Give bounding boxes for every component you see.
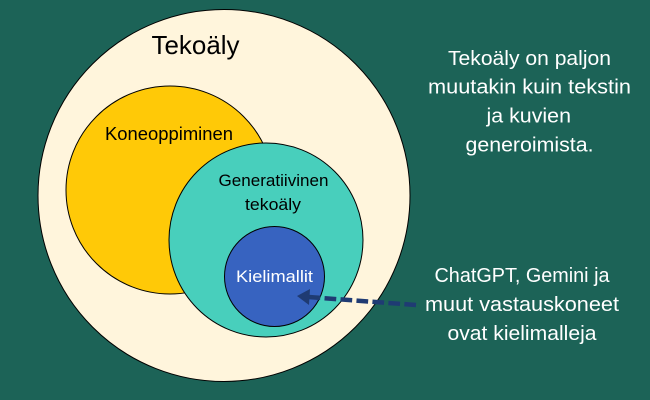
text block: intro: generoimista. [466,134,594,156]
text block: chatbots: ChatGPT, Gemini ja [434,264,610,287]
label: Koneoppiminen: Koneoppiminen [105,124,233,144]
text block: chatbots: muut vastauskoneet [425,293,619,316]
circle: Tekoäly [38,10,410,382]
circle: Koneoppiminen [66,86,274,294]
text block: chatbots [425,264,619,345]
circle: Kielimallit [224,226,324,326]
text block: intro: ja kuvien [485,104,571,128]
label: Generatiivinen tekoäly [218,172,328,214]
text block: intro: Tekoäly on paljon [448,47,611,70]
label: Generatiivinen tekoäly: Generatiivinen [218,172,328,190]
heading: Tekoäly: Tekoäly [152,30,240,60]
text block: intro: muutakin kuin tekstin [428,76,631,98]
text block: intro [428,47,631,156]
circle: Generatiivinen tekoäly [169,143,363,337]
arrow: points to Kielimallit [297,289,416,305]
label: Generatiivinen tekoäly: tekoäly [245,196,302,214]
text block: chatbots: ovat kielimalleja [448,322,597,345]
label: Kielimallit: Kielimallit [236,268,313,286]
